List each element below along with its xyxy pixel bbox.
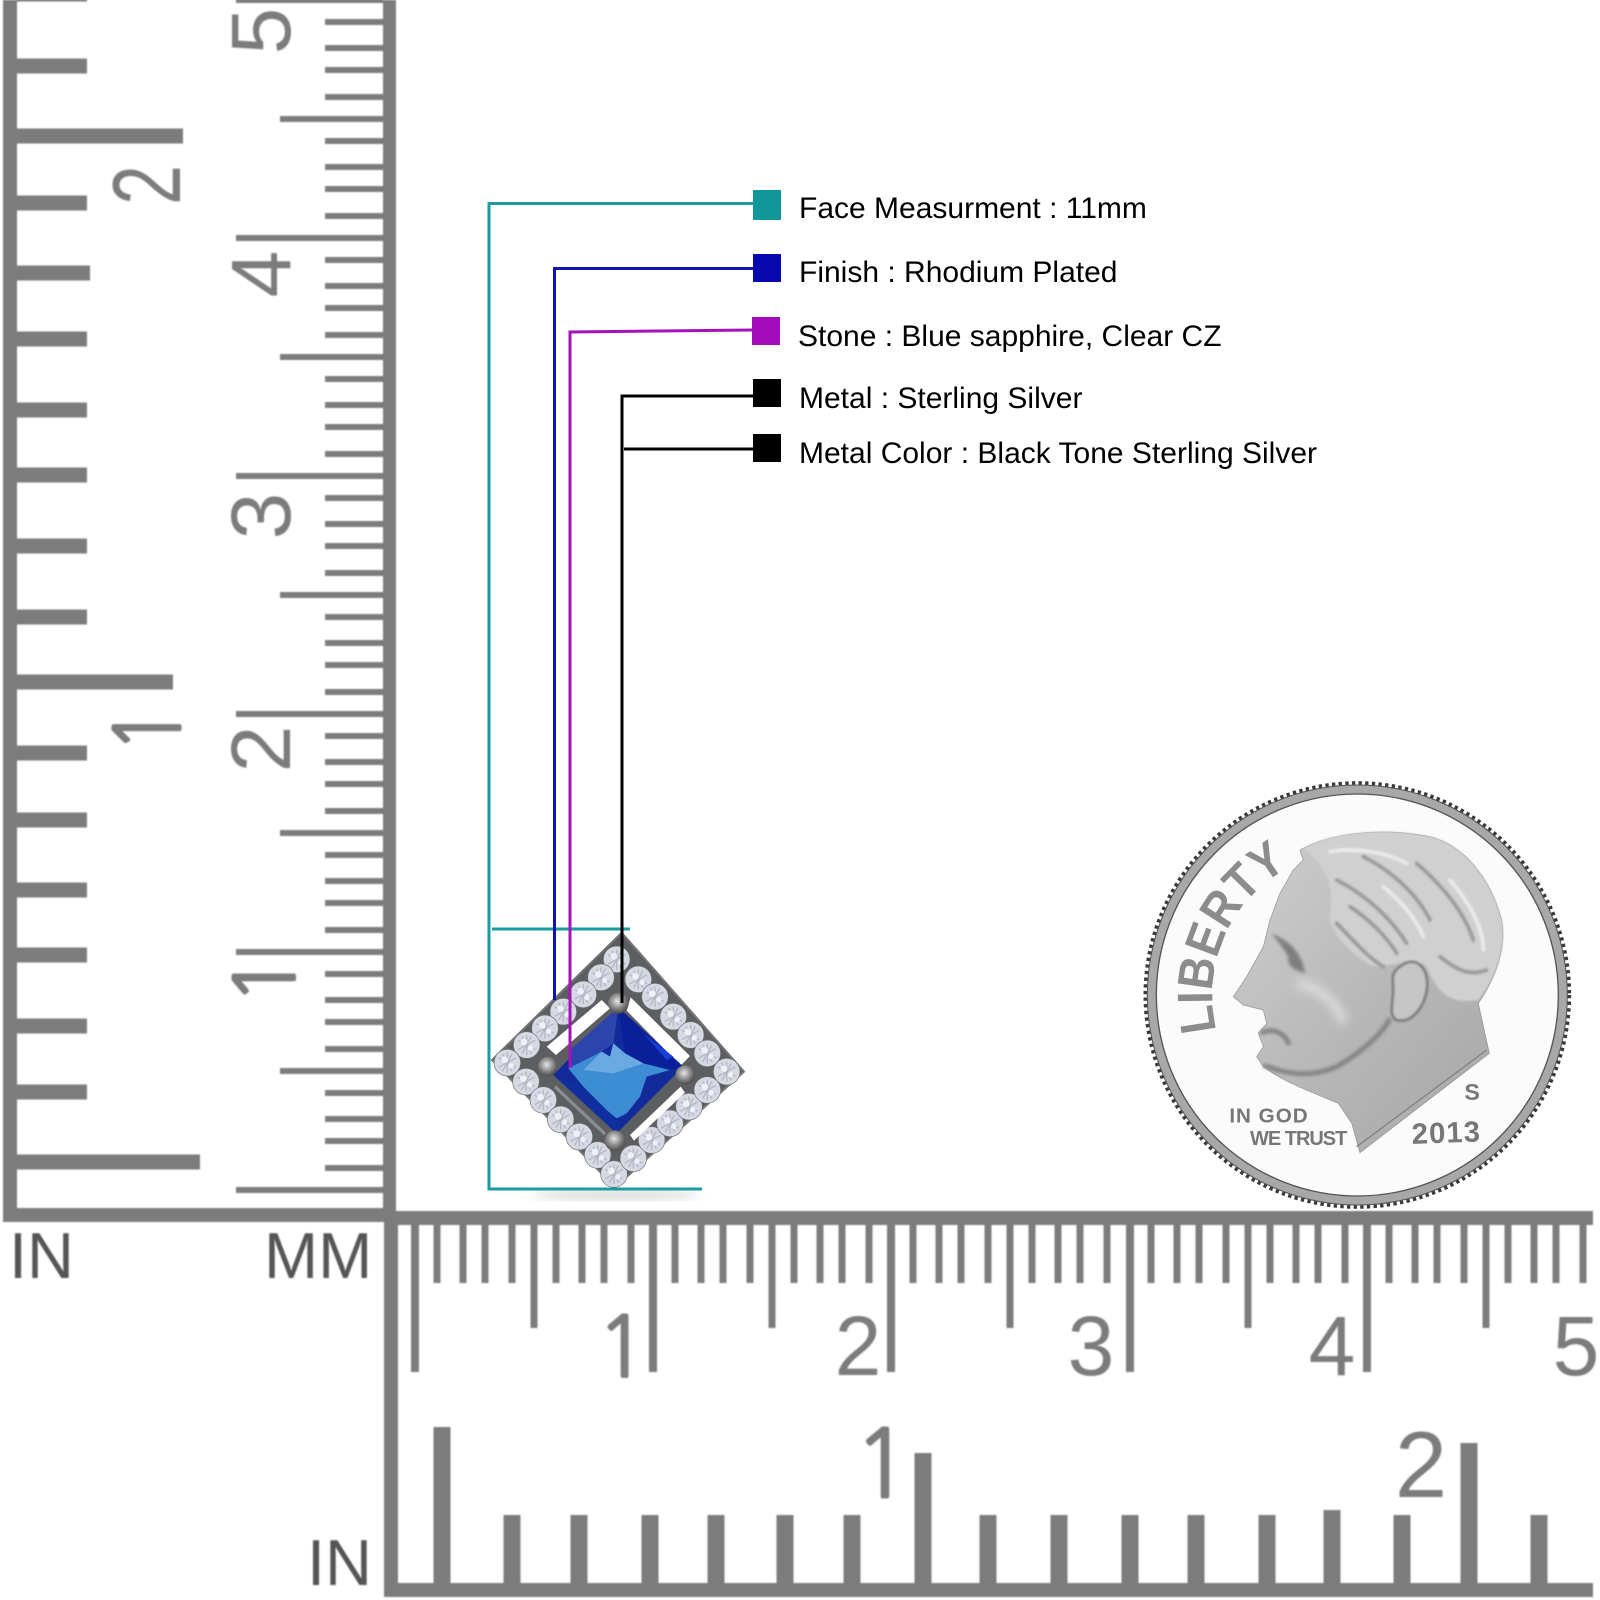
line: finish [554,268,753,1000]
vertical ruler numbers: 1 [104,707,194,753]
horizontal ruler numbers [597,1299,1599,1517]
horizontal ruler [384,1211,1599,1597]
millimetre ticks [236,0,383,1190]
vertical ruler numbers: 2 [214,726,308,772]
pendant [492,933,744,1187]
vertical ruler numbers: 1 [224,955,308,1005]
coin inscriptions: WE TRUST [1250,1128,1347,1150]
line: metal [622,396,753,1003]
hair [1303,832,1503,1001]
coin inscriptions: LIBERTY [1178,839,1278,1033]
dime coin [1144,781,1572,1209]
vertical ruler numbers [92,8,308,1005]
label: IN bottom: IN [307,1526,372,1599]
ruler frame [3,0,396,1222]
openings in setting [547,997,690,1141]
coin inscriptions: S [1464,1079,1480,1105]
vertical ruler numbers: 3 [214,493,308,539]
unit labels [9,1219,372,1599]
legend row: finish: Finish : Rhodium Plated [799,256,1118,289]
callout lines [489,204,753,1189]
coin inscriptions [1178,839,1481,1151]
facial shading [1272,933,1305,973]
label: IN left: IN [9,1219,74,1292]
legend row: metal: Metal : Sterling Silver [799,382,1082,415]
coin inscriptions: IN GOD [1229,1105,1308,1128]
line: stone [570,330,752,1068]
vertical ruler numbers: 4 [214,251,308,297]
inch ticks [17,0,200,1162]
portrait [1233,832,1503,1153]
ruler frame [384,1211,1593,1597]
setting bar [555,1087,605,1134]
horizontal ruler numbers: 4 [1309,1299,1355,1393]
label: MM: MM [264,1219,372,1292]
vertical ruler [3,0,396,1222]
horizontal ruler numbers: 2 [1395,1412,1447,1517]
ear [1392,962,1427,1021]
legend row: metal color: Metal Color : Black Tone Sterling Silver [799,437,1317,470]
legend row: stone: Stone : Blue sapphire, Clear CZ [798,320,1222,353]
blue gem [553,1007,683,1133]
horizontal ruler numbers: 1 [854,1417,910,1511]
horizontal ruler numbers: 2 [835,1299,881,1393]
pendant shadow [530,1191,700,1199]
horizontal ruler numbers: 5 [1553,1299,1599,1393]
vertical ruler numbers: 2 [92,165,200,205]
prongs [538,993,695,1151]
halo stones [494,946,740,1187]
vertical ruler numbers: 5 [214,8,308,54]
coin inscriptions: 2013 [1411,1115,1481,1151]
legend row: face: Face Measurment : 11mm [799,192,1147,225]
horizontal ruler numbers: 1 [597,1306,647,1390]
horizontal ruler numbers: 3 [1068,1299,1114,1393]
coin body and rim [1145,783,1569,1207]
legend [752,190,1317,470]
millimetre ticks [415,1225,1367,1372]
line: face measurement [489,204,753,1189]
inch ticks [442,1427,1539,1583]
metal frame [492,933,744,1187]
